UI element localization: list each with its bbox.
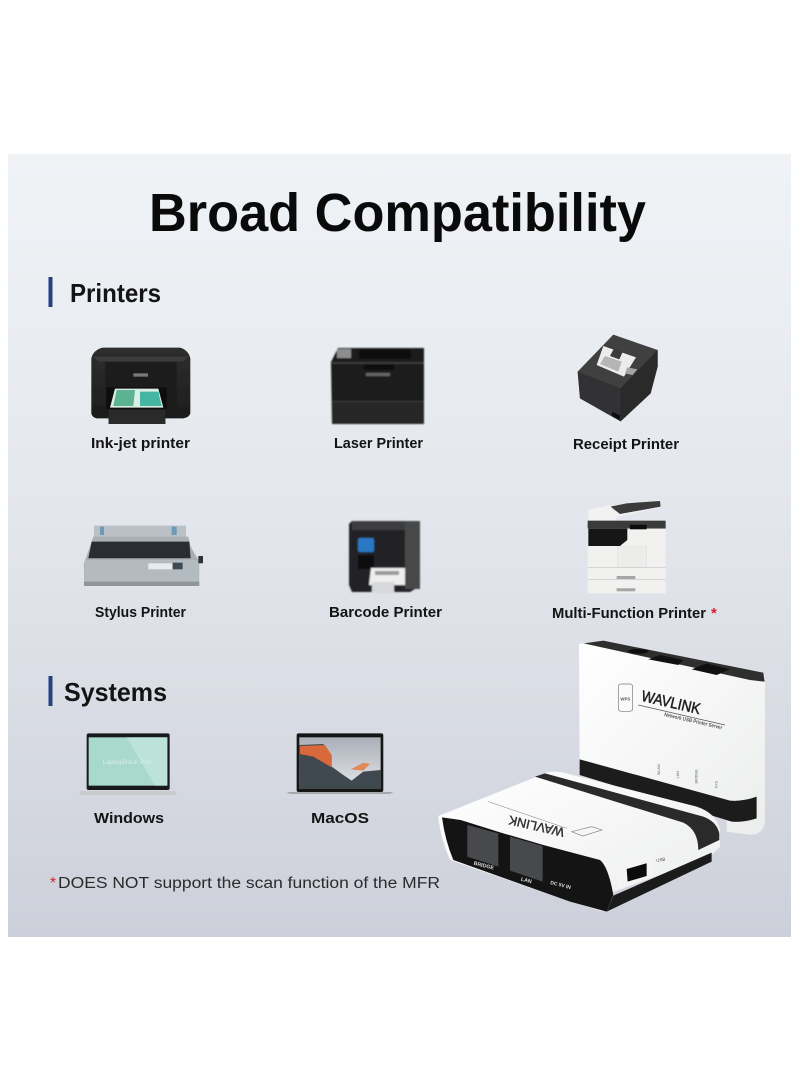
icon: macos laptop [287,733,393,794]
label: ink-jet printer: Ink-jet printer [91,435,190,452]
icon: stylus printer [84,526,203,586]
device: upright unit: Network USB Printer Server [664,712,723,731]
label: receipt printer: Receipt Printer [573,436,679,453]
device: flat unit: WAVLINK [507,813,566,839]
icon: ink-jet printer [91,348,190,424]
icon: barcode printer [349,521,420,593]
device: flat unit: LAN [520,877,532,885]
label: multi-function printer: Multi-Function Printer [552,605,706,622]
device: upright unit: WPS [620,697,630,702]
device: flat unit [438,772,720,912]
device: upright unit: BRIDGE [694,769,698,783]
background panel [8,154,791,937]
heading: printers: Printers [70,278,161,308]
label: barcode printer: Barcode Printer [329,604,442,621]
icon: windows laptop: LaptopBook Pro [103,759,151,766]
label: laser printer: Laser Printer [334,435,423,452]
device: upright unit: WLAN [657,764,661,775]
device: upright unit: LAN [676,771,680,778]
device: upright unit: SYS [714,780,718,788]
label: stylus printer: Stylus Printer [95,604,186,621]
device: flat unit: USB [656,856,666,863]
footnote: DOES NOT support the scan function of the MFR [58,875,440,892]
icon: multi-function printer [588,501,666,593]
footnote: * [50,875,56,892]
label: windows: Windows [94,810,164,827]
device: flat unit: DC 5V IN [550,880,572,891]
label: macos: MacOS [311,810,369,827]
device: upright unit: WAVLINK [640,688,703,718]
label: multi-function printer: * [711,605,717,622]
icon: receipt printer [578,335,658,421]
device: upright unit [579,641,765,835]
device: flat unit: BRIDGE [473,861,495,872]
icon: windows laptop [79,733,177,795]
heading: systems: Systems [64,677,167,707]
icon: laser printer [331,348,424,424]
title: Broad Compatibility [149,183,646,243]
product: network printer server devices [438,641,765,912]
